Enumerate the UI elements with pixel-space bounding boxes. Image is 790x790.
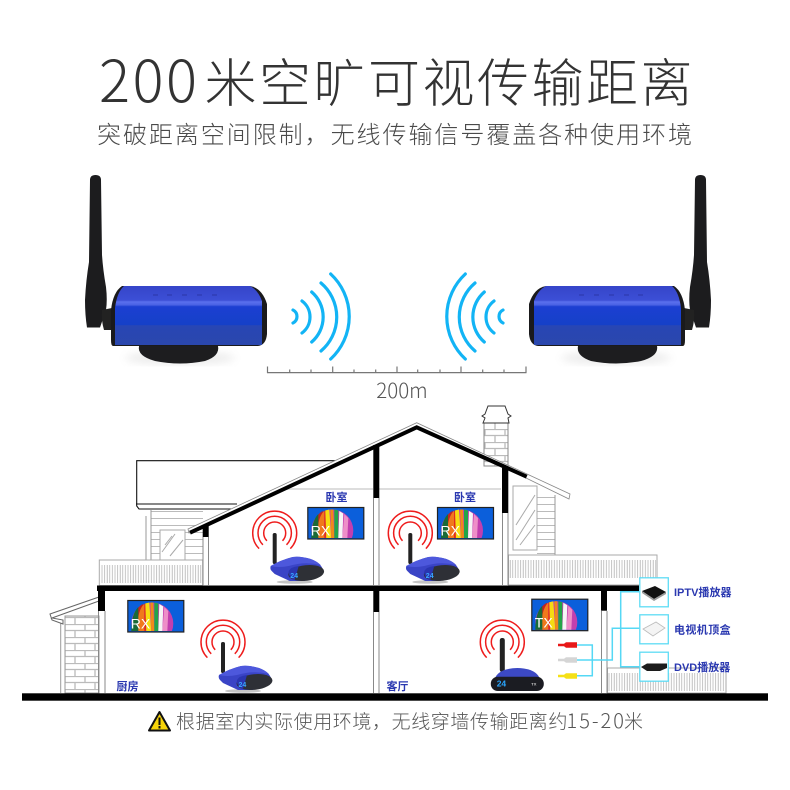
left wireless device — [85, 175, 267, 365]
source box: DVD player — [640, 652, 730, 681]
receiver: kitchen: 24 — [238, 682, 246, 689]
chimney — [482, 406, 511, 466]
transmitter: living room: 24 — [497, 678, 506, 688]
TV picture: bedroom left RX — [308, 508, 364, 552]
room label: bedroom right: 卧室 — [454, 490, 476, 504]
TV picture: bedroom right RX: RX — [440, 523, 461, 539]
warning note: 米 — [624, 707, 643, 734]
warning note: 15-20 — [566, 705, 626, 734]
right wireless device — [529, 175, 711, 365]
room label: bedroom left: 卧室 — [326, 490, 348, 504]
receiver: bedroom left: 24 — [290, 573, 298, 580]
upper left roof block — [136, 461, 335, 509]
upper left siding wall — [146, 510, 203, 562]
set-top box label: 电视机顶盒 — [674, 622, 731, 636]
stand — [139, 346, 218, 364]
upper left balcony — [99, 560, 203, 586]
TV picture: kitchen RX — [128, 600, 184, 644]
upper right balcony — [508, 555, 657, 585]
title: 200 — [99, 35, 200, 119]
room label: living room: 客厅 — [386, 679, 408, 693]
transmitter: living room — [480, 620, 544, 691]
walls — [98, 445, 607, 693]
TV picture: kitchen RX: RX — [131, 616, 151, 632]
warning icon — [149, 712, 170, 730]
distance label: 200m — [376, 374, 428, 404]
TV picture: bedroom right RX — [438, 508, 494, 552]
warning note: 根据室内实际使用环境，无线穿墙传输距离约 — [176, 707, 568, 734]
right signal waves — [447, 274, 503, 359]
receiver: bedroom right — [388, 511, 461, 584]
transmitter: living room: TX — [531, 682, 537, 686]
house illustration — [22, 406, 768, 701]
source box: IPTV player — [640, 578, 731, 607]
receiver: kitchen — [201, 620, 273, 693]
ceiling line — [287, 488, 501, 490]
upper floor slab — [97, 586, 639, 591]
ground slab — [22, 693, 768, 701]
indicator dots — [153, 294, 217, 296]
right window and siding — [513, 486, 555, 555]
room label: kitchen: 厨房 — [116, 679, 138, 693]
title: 米空旷可视传输距离 — [204, 42, 695, 117]
connection cables — [577, 592, 639, 676]
device body — [111, 286, 267, 346]
TV picture: bedroom left RX: RX — [311, 523, 331, 539]
TV picture: living room TX — [532, 599, 588, 643]
TV picture: living room TX: TX — [535, 614, 553, 630]
base shadow — [125, 351, 235, 365]
side shed — [50, 597, 99, 693]
antenna — [85, 175, 107, 328]
left signal waves — [293, 274, 349, 359]
DVD label: DVD播放器 — [674, 660, 730, 674]
source box: set-top box — [640, 615, 731, 644]
antenna connector — [102, 308, 113, 330]
distance ruler — [267, 366, 526, 373]
subtitle: 突破距离空间限制，无线传输信号覆盖各种使用环境 — [97, 115, 692, 150]
roof — [188, 423, 570, 533]
lower right balcony — [608, 668, 726, 693]
RCA plugs — [558, 642, 577, 679]
receiver: bedroom left — [253, 511, 325, 584]
IPTV label: IPTV播放器 — [674, 585, 731, 599]
receiver: bedroom right: 24 — [426, 573, 434, 580]
